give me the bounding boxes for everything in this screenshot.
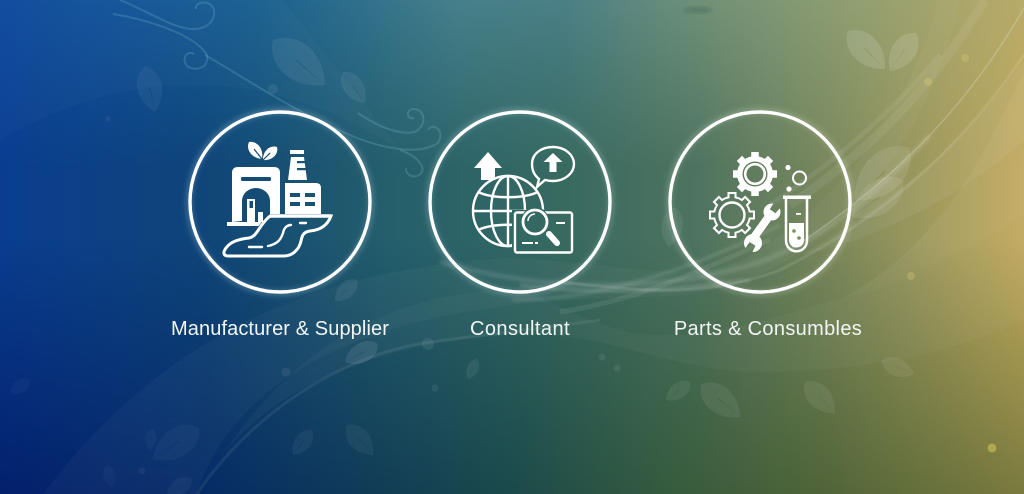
icon: factory with leaves and road (220, 140, 335, 260)
icon: globe, arrows and magnifier (473, 147, 574, 252)
label: Consultant: Consultant (470, 318, 570, 340)
circle: consultant (429, 111, 611, 293)
icon circles and pictograms (184, 106, 856, 298)
label: Parts & Consumbles: Parts & Consumbles (674, 318, 862, 340)
circle: parts and consumables (669, 111, 851, 293)
swirls (120, 0, 214, 29)
icon: gears, wrench and test tube (709, 152, 811, 252)
label: Manufacturer & Supplier: Manufacturer & Supplier (171, 318, 389, 340)
circle: manufacturer (189, 111, 371, 293)
